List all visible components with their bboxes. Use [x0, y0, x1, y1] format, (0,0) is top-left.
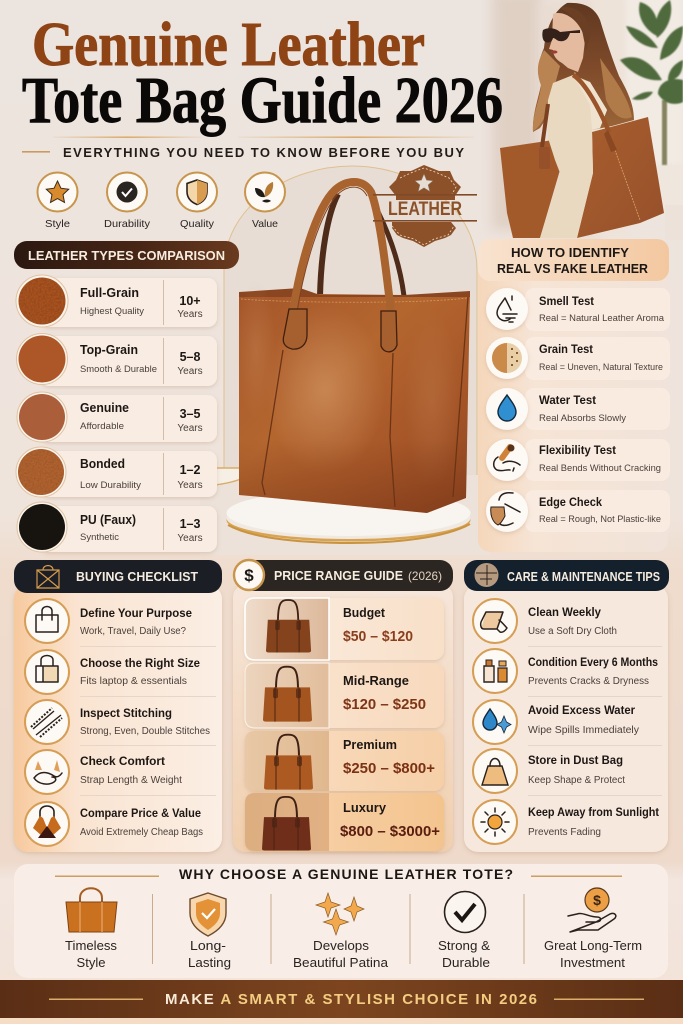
row: bonded: Bonded: [80, 456, 125, 471]
tip: dust bag: Keep Shape & Protect: [528, 775, 625, 786]
section: how to identify real vs fake: [478, 239, 670, 552]
item: inspect stitching: Strong, Even, Double Stitches: [80, 726, 210, 737]
heading: PRICE RANGE GUIDE: [274, 568, 403, 583]
section: leather types comparison: [14, 241, 239, 552]
row: grain test: [486, 337, 670, 380]
item: inspect stitching: Inspect Stitching: [80, 706, 172, 720]
bottom shading: [239, 440, 468, 513]
section: care and maintenance tips: [464, 560, 669, 852]
item: choose right size: [25, 650, 200, 694]
heading: WHY CHOOSE A GENUINE LEATHER TOTE?: [179, 866, 513, 882]
row: smell test: Real = Natural Leather Aroma: [539, 313, 665, 324]
sunglasses: [542, 28, 580, 42]
tier: premium: $250 – $800+: [343, 760, 435, 777]
tier: luxury: Luxury: [343, 800, 387, 815]
tier: budget: $50 – $120: [343, 628, 413, 645]
row: top-grain: [16, 334, 217, 386]
row: edge check: Edge Check: [539, 497, 603, 509]
row: flexibility test: Flexibility Test: [539, 445, 616, 457]
heading: [478, 239, 669, 281]
benefit: timeless style: [65, 888, 117, 970]
row: water test: Water Test: [539, 395, 596, 407]
row: bonded: Years: [177, 480, 203, 491]
icon: quality shield: [177, 172, 217, 230]
face: [549, 13, 585, 72]
pedestal: [226, 490, 470, 542]
item: compare price: Compare Price & Value: [80, 806, 201, 820]
row: water test: [486, 388, 670, 430]
tip: condition: Prevents Cracks & Dryness: [528, 676, 649, 687]
panel background: [233, 585, 453, 852]
row: edge check: [486, 490, 670, 532]
tier: luxury: [245, 793, 444, 851]
woman with tote bag: [500, 3, 664, 238]
row: PU faux: Years: [177, 533, 203, 544]
row: PU faux: [17, 502, 217, 552]
benefit: long-term investment: $: [593, 892, 601, 908]
row: genuine: Genuine: [80, 400, 129, 415]
pedestal gold rim: [228, 524, 470, 543]
title: Genuine Leather: [32, 11, 425, 79]
item: define your purpose: Work, Travel, Daily Use?: [80, 626, 186, 637]
row: smell test: [486, 288, 670, 331]
tip: clean weekly: [473, 599, 617, 643]
icon: durability check: Durability: [104, 218, 151, 230]
tier: luxury: $800 – $3000+: [340, 823, 440, 840]
tip: sunlight: Prevents Fading: [528, 827, 601, 838]
back handle: [320, 194, 404, 296]
item: choose right size: Choose the Right Size: [80, 656, 200, 670]
heading pill: [14, 241, 239, 269]
hero tote bag on pedestal: [226, 182, 470, 543]
footer banner: MAKE A SMART & STYLISH CHOICE IN 2026: [165, 991, 537, 1008]
tote bag left portion: [500, 140, 560, 238]
heading: (2026): [408, 569, 442, 583]
panel background: [14, 585, 222, 852]
row: flexibility test: [486, 439, 670, 481]
item: choose right size: Fits laptop & essentials: [80, 676, 187, 687]
tip: sunlight: [473, 800, 659, 844]
benefit: strong and durable: [438, 892, 491, 970]
tip: condition: [473, 649, 658, 693]
section: buying checklist: [14, 560, 222, 852]
benefit: timeless style: Style: [76, 956, 106, 970]
item: inspect stitching: [25, 700, 210, 744]
icon: durability check: [104, 172, 151, 230]
row: PU faux: PU (Faux): [80, 512, 136, 527]
row: full-grain: Years: [177, 309, 203, 320]
benefit: patina sparkles: Beautiful Patina: [293, 956, 388, 970]
row: bonded: 1–2: [180, 463, 200, 477]
tip: clean weekly: Clean Weekly: [528, 605, 601, 619]
benefit: long-lasting: Long-: [190, 939, 226, 953]
row: top-grain: Smooth & Durable: [80, 364, 157, 375]
icon: value leaf: [245, 172, 285, 230]
row: top-grain: Years: [177, 366, 203, 377]
row: grain test: Real = Uneven, Natural Texture: [539, 362, 663, 373]
heading pill: LEATHER TYPES COMPARISON: [28, 248, 225, 263]
row: flexibility test: Real Bends Without Cracking: [539, 463, 661, 474]
tip: dust bag: Store in Dust Bag: [528, 753, 623, 767]
tier: mid-range: Mid-Range: [343, 673, 409, 688]
row: full-grain: 10+: [179, 294, 201, 308]
benefit: long-term investment: [544, 888, 642, 970]
item: compare price: [25, 802, 203, 846]
leather badge: LEATHER: [388, 199, 462, 220]
tip: avoid water: Avoid Excess Water: [528, 703, 635, 717]
heading: [464, 560, 669, 591]
heading: [234, 560, 453, 591]
icon: quality shield: Quality: [180, 218, 215, 230]
arch backdrop: [224, 166, 477, 480]
item: check comfort: Check Comfort: [80, 754, 165, 768]
tip: avoid water: Wipe Spills Immediately: [528, 725, 639, 736]
dividers: [152, 894, 524, 964]
item: define your purpose: Define Your Purpose: [80, 606, 192, 620]
benefit: long-lasting: Lasting: [188, 956, 231, 970]
subtitle: EVERYTHING YOU NEED TO KNOW BEFORE YOU BUY: [63, 145, 464, 160]
panel background: [464, 585, 668, 852]
benefit: long-term investment: Great Long-Term: [544, 939, 642, 953]
icon: value leaf: Value: [252, 218, 278, 230]
row: top-grain: 5–8: [180, 350, 200, 364]
leather badge: [373, 165, 477, 247]
item: define your purpose: [25, 599, 192, 643]
row: edge check: Real = Rough, Not Plastic-like: [539, 514, 661, 525]
title: [22, 11, 503, 137]
bag straps: [573, 75, 609, 132]
tip: avoid water: [473, 700, 639, 744]
row: PU faux: Synthetic: [80, 532, 119, 543]
tip: clean weekly: Use a Soft Dry Cloth: [528, 626, 617, 637]
tier: budget: [245, 598, 444, 660]
title: Tote Bag Guide 2026: [22, 64, 503, 137]
bag body: [239, 292, 470, 513]
benefit: long-term investment: Investment: [560, 956, 626, 970]
row: genuine: Years: [177, 423, 203, 434]
icon: style star: [38, 172, 78, 230]
leather sheen: [265, 305, 385, 475]
feature icon row: [38, 172, 285, 230]
tip: dust bag: [473, 749, 625, 793]
floor and side platform: [200, 468, 490, 555]
row: water test: Real Absorbs Slowly: [539, 413, 626, 424]
row: bonded: Low Durability: [80, 480, 141, 491]
tier: premium: Premium: [343, 737, 397, 752]
tip: condition: Condition Every 6 Months: [528, 655, 658, 669]
row: full-grain: Full-Grain: [80, 285, 139, 300]
benefit: strong and durable: Durable: [442, 956, 490, 970]
section: why choose a genuine leather tote: [14, 864, 668, 978]
tier: premium: [245, 731, 444, 791]
blazer: [540, 75, 607, 238]
heading: BUYING CHECKLIST: [76, 569, 198, 584]
blurred interior scene: [492, 0, 683, 240]
tier: budget: Budget: [343, 605, 386, 620]
benefit: patina sparkles: Develops: [313, 939, 369, 953]
item: check comfort: Strap Length & Weight: [80, 775, 182, 786]
plant: [620, 0, 683, 165]
tote bag right portion: [577, 117, 664, 238]
row: PU faux: 1–3: [180, 517, 200, 531]
row: smell test: Smell Test: [539, 296, 594, 308]
row: genuine: [17, 392, 217, 442]
row: full-grain: Highest Quality: [80, 306, 144, 317]
footer banner: [0, 980, 683, 1018]
icon: style star: Style: [45, 218, 70, 230]
tier: mid-range: [245, 663, 444, 728]
benefit: patina sparkles: [293, 893, 388, 970]
section: price range guide: [233, 560, 453, 852]
heading: CARE & MAINTENANCE TIPS: [507, 570, 660, 584]
hair back: [533, 3, 634, 132]
row: top-grain: Top-Grain: [80, 342, 138, 357]
row: genuine: 3–5: [180, 407, 200, 421]
panel background: [14, 864, 668, 978]
heading: HOW TO IDENTIFY: [511, 245, 629, 260]
handle tabs: [283, 309, 307, 349]
bottom edge strip: [0, 1016, 683, 1024]
tier: mid-range: $120 – $250: [343, 696, 426, 713]
tip: sunlight: Keep Away from Sunlight: [528, 805, 659, 819]
heading: [14, 560, 222, 593]
benefit: timeless style: Timeless: [65, 939, 117, 953]
heading: REAL VS FAKE LEATHER: [497, 261, 649, 276]
row: grain test: Grain Test: [539, 344, 593, 356]
row: bonded: [16, 447, 217, 497]
item: check comfort: [25, 750, 182, 794]
heading: $: [244, 566, 254, 585]
row: genuine: Affordable: [80, 421, 124, 432]
benefit: long-lasting: [188, 893, 231, 970]
benefit: strong and durable: Strong &: [438, 939, 491, 953]
item: compare price: Avoid Extremely Cheap Bags: [80, 827, 203, 838]
panel background: [478, 245, 668, 552]
seams: [262, 297, 468, 507]
front handle: [293, 182, 391, 312]
row: full-grain: [16, 275, 217, 327]
